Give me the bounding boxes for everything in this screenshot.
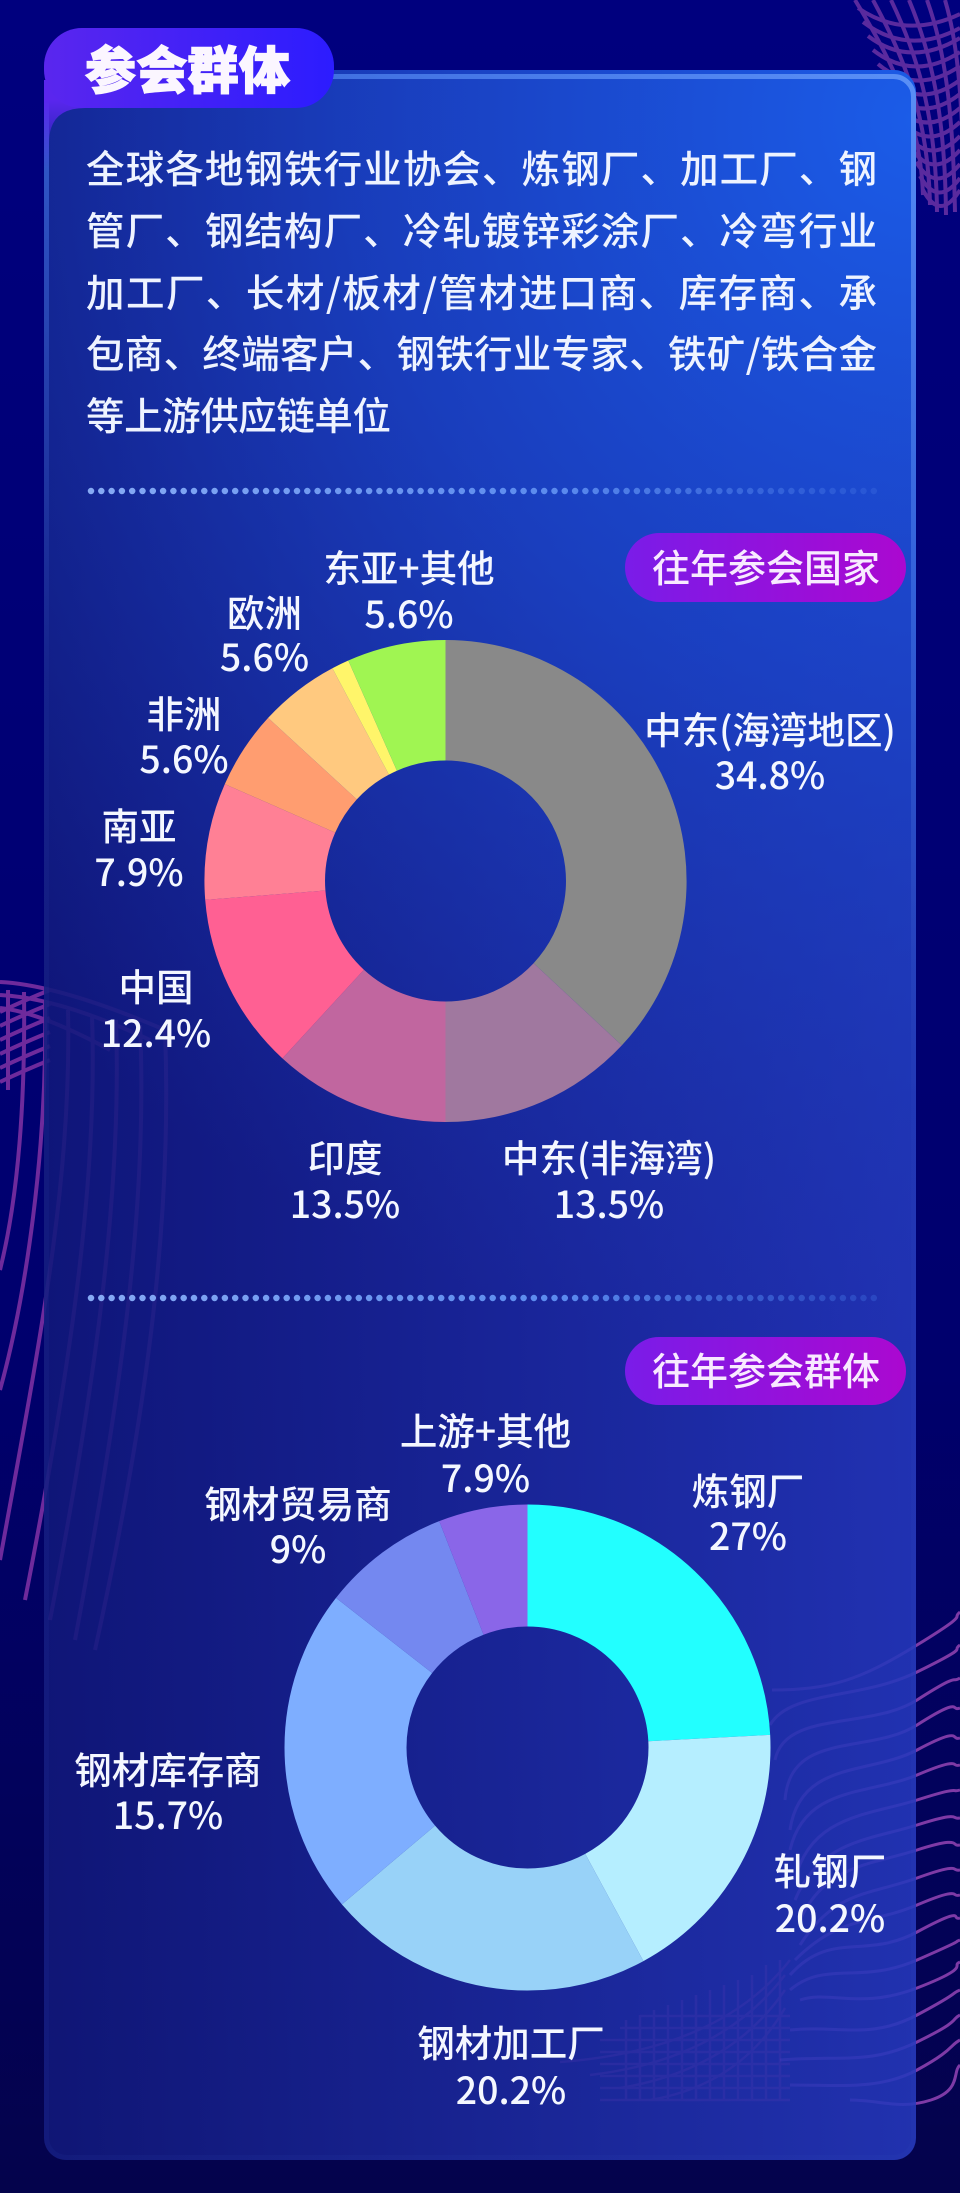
label: steel stockists: 15.7%: [113, 1785, 223, 1840]
labels: attendee groups: [74, 1401, 886, 2115]
decoration: faint mesh over panel: [560, 1960, 790, 2100]
label: rolling mills: 轧钢厂: [774, 1841, 886, 1896]
label: Africa: 非洲: [146, 684, 222, 739]
label: Middle East non-Gulf: 中东(非海湾): [502, 1128, 716, 1183]
pill: past attendee groups: 往年参会群体: [652, 1341, 880, 1396]
label: steel mills: [692, 1461, 804, 1561]
label: upstream and others: 7.9%: [441, 1448, 530, 1503]
label: China: 12.4%: [101, 1003, 211, 1058]
decoration: left mesh and curves: [0, 982, 166, 1650]
section tab: [44, 28, 334, 170]
label: upstream and others: [400, 1401, 571, 1503]
dotted divider 1: [91, 488, 880, 494]
label: Middle East Gulf: [644, 700, 896, 800]
donut chart: countries: [204, 640, 687, 1122]
label: South Asia: 南亚: [102, 796, 176, 851]
label: steel processors: 钢材加工厂: [417, 2013, 605, 2068]
intro text block: 加工厂、长材/板材/管材进口商、库存商、承: [86, 263, 877, 319]
label: Africa: 5.6%: [139, 729, 229, 784]
label: rolling mills: 20.2%: [775, 1888, 885, 1943]
label: steel traders: 钢材贸易商: [204, 1474, 392, 1529]
label: China: 中国: [118, 957, 194, 1012]
label: upstream and others: 上游+其他: [400, 1401, 571, 1456]
label: rolling mills: [774, 1841, 886, 1943]
intro text block: 全球各地钢铁行业协会、炼钢厂、加工厂、钢: [86, 139, 877, 195]
label: steel traders: [204, 1474, 392, 1574]
label: Europe: 5.6%: [220, 627, 309, 682]
label: steel traders: 9%: [270, 1519, 326, 1574]
intro text block: 包商、终端客户、钢铁行业专家、铁矿/铁合金: [86, 324, 877, 380]
pill: past attendee groups: [625, 1337, 906, 1405]
decoration: bottom-right wave lines: [770, 1612, 960, 2104]
label: steel processors: [417, 2013, 605, 2115]
label: Middle East non-Gulf: 13.5%: [554, 1174, 664, 1229]
label: steel stockists: [74, 1740, 262, 1840]
labels: countries: [94, 538, 896, 1229]
label: steel mills: 27%: [709, 1506, 787, 1561]
decoration: top-right mesh: [855, 0, 960, 215]
label: India: 印度: [308, 1128, 382, 1183]
label: Europe: [220, 583, 309, 682]
label: steel mills: 炼钢厂: [692, 1461, 804, 1516]
pill: past countries: [625, 533, 906, 602]
label: South Asia: 7.9%: [94, 842, 184, 897]
label: East Asia and others: [323, 538, 495, 639]
label: India: 13.5%: [290, 1174, 400, 1229]
intro text block: 管厂、钢结构厂、冷轧镀锌彩涂厂、冷弯行业: [86, 201, 877, 257]
label: Middle East non-Gulf: [502, 1128, 716, 1229]
label: South Asia: [94, 796, 184, 897]
label: Europe: 欧洲: [227, 583, 302, 638]
intro text block: [86, 139, 877, 442]
section title: 参会群体: [85, 30, 290, 104]
label: Africa: [139, 684, 229, 784]
label: India: [290, 1128, 400, 1229]
pill: past countries: 往年参会国家: [652, 538, 880, 593]
donut chart: attendee groups: [346, 1566, 710, 1930]
label: steel processors: 20.2%: [456, 2060, 566, 2115]
intro text block: 等上游供应链单位: [86, 386, 391, 442]
label: China: [101, 957, 211, 1058]
dotted divider 2: [91, 1295, 880, 1301]
label: steel stockists: 钢材库存商: [74, 1740, 262, 1795]
label: East Asia and others: 东亚+其他: [323, 538, 495, 593]
label: Middle East Gulf: 中东(海湾地区): [644, 700, 896, 755]
label: Middle East Gulf: 34.8%: [715, 745, 825, 800]
label: East Asia and others: 5.6%: [364, 584, 454, 639]
